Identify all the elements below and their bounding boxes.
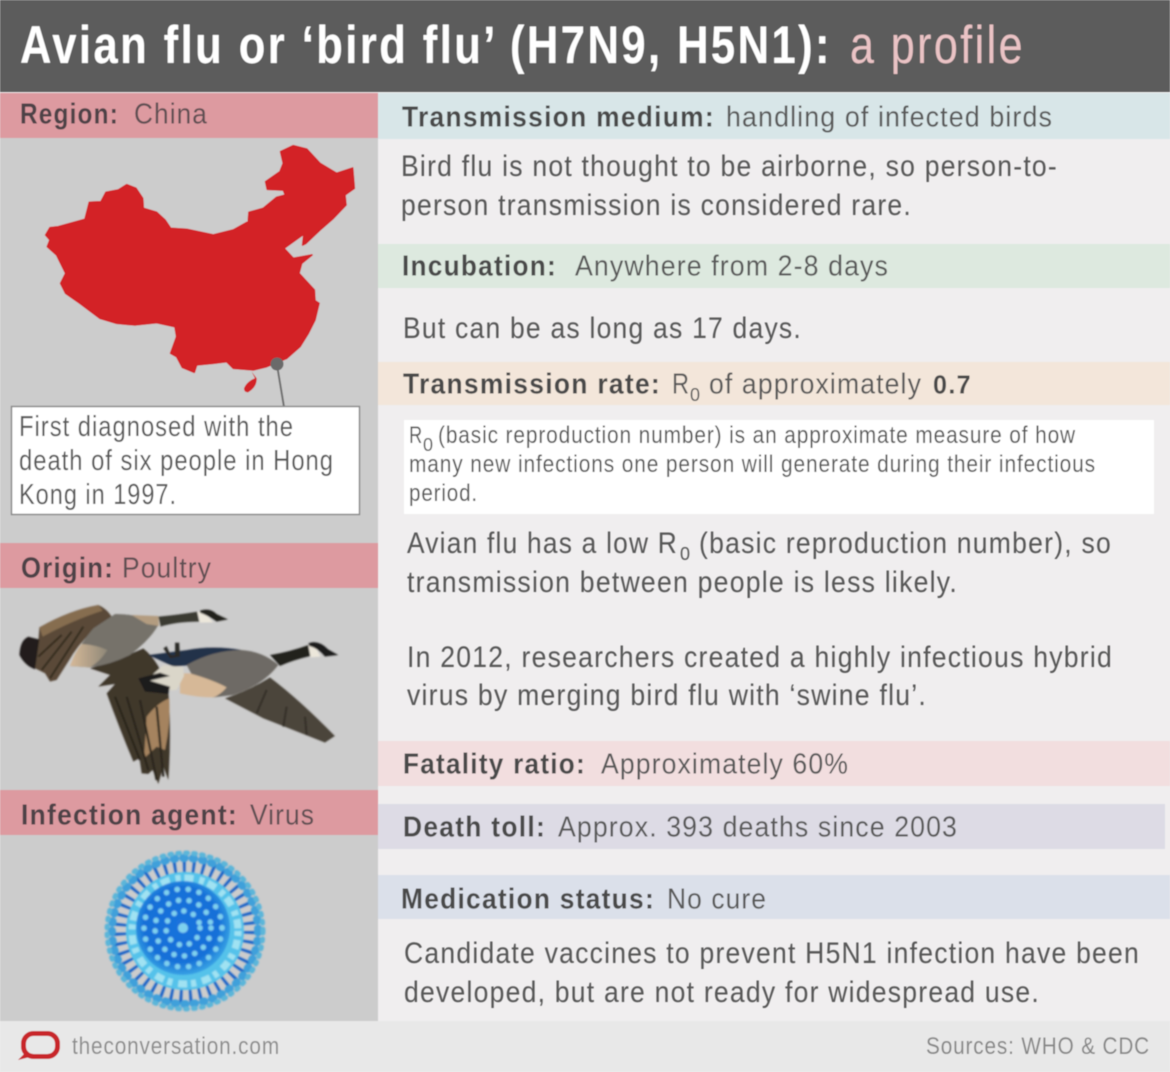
panel: transmission rate: 0.7: [933, 369, 972, 399]
callout: R0 definition: 0: [423, 435, 433, 455]
text: transmission description: Bird flu is not thought to be airborne, so person-to-: [401, 150, 1058, 183]
panel: transmission medium: [378, 93, 1170, 222]
callout: first diagnosed: death of six people in Hong: [19, 445, 334, 477]
text: vaccines: developed, but are not ready for widespread use.: [404, 976, 1040, 1009]
panel: fatality ratio: Approximately 60%: [601, 748, 849, 780]
panel: medication status: Medication status:: [401, 883, 655, 915]
rear goose lower wing: [90, 648, 170, 784]
callout: R0 definition: R: [409, 422, 423, 449]
text: 2012 hybrid virus: virus by merging bird flu with ‘swine flu’.: [407, 679, 927, 712]
panel: death toll: Approx. 393 deaths since 2003: [558, 811, 958, 843]
panel: death toll: [378, 804, 1165, 849]
heading: infection agent: Virus: [250, 799, 315, 831]
text: low R0 explanation: Avian flu has a low R: [407, 527, 678, 560]
footer: [0, 1021, 1170, 1072]
panel: transmission medium: handling of infected birds: [726, 101, 1053, 133]
panel: transmission rate: [378, 362, 1170, 712]
front goose far wing: [148, 647, 242, 667]
panel: transmission rate: 0: [690, 385, 700, 405]
heading: infection agent: Infection agent:: [21, 799, 238, 831]
callout: R0 definition: period.: [409, 480, 478, 507]
panel: transmission rate: of approximately: [709, 368, 922, 400]
callout: first diagnosed: Kong in 1997.: [19, 479, 177, 511]
panel: death toll: Death toll:: [403, 811, 546, 843]
map: China: [46, 146, 354, 392]
panel: fatality ratio: Fatality ratio:: [403, 748, 586, 780]
panel: incubation: Incubation:: [402, 250, 557, 282]
panel: transmission medium: Transmission medium:: [402, 101, 715, 133]
title: a profile: [850, 16, 1025, 75]
text: low R0 explanation: (basic reproduction number), so: [699, 527, 1112, 560]
panel: left column: [0, 93, 378, 1021]
callout: R0 definition: (basic reproduction number) is an approximate measure of how: [438, 422, 1076, 449]
front goose body: [187, 650, 278, 697]
panel: fatality ratio: [378, 741, 1170, 786]
text: low R0 explanation: 0: [680, 544, 690, 564]
image: flying geese: [19, 605, 338, 784]
panel: transmission rate: R: [672, 368, 690, 400]
text: 2012 hybrid virus: [407, 641, 1113, 712]
text: website: theconversation.com: [72, 1033, 280, 1060]
text: low R0 explanation: transmission between people is less likely.: [407, 566, 958, 599]
heading: origin: Poultry: [122, 552, 212, 584]
title: [0, 0, 1170, 92]
callout: first diagnosed: [12, 406, 360, 514]
heading: region: [0, 93, 378, 138]
heading: region: China: [134, 98, 208, 130]
text: incubation note: But can be as long as 17 days.: [403, 312, 802, 345]
text: low R0 explanation: [407, 527, 1112, 599]
text: transmission description: [401, 150, 1058, 222]
panel: incubation: Anywhere from 2-8 days: [575, 250, 889, 282]
callout: R0 definition: [404, 420, 1154, 514]
icon: The Conversation logo: [18, 1034, 58, 1060]
heading: region: Region:: [20, 98, 119, 130]
text: vaccines: [404, 937, 1140, 1009]
panel: transmission rate: Transmission rate:: [403, 368, 661, 400]
panel: incubation: [378, 244, 1170, 345]
icon: virus: [107, 853, 263, 1009]
heading: origin: [0, 543, 378, 588]
panel: medication status: No cure: [667, 883, 767, 915]
pointer: Hong Kong marker: [270, 358, 284, 407]
heading: origin: Origin:: [21, 552, 114, 584]
front goose lower wing: [225, 677, 335, 743]
title: Avian flu or ‘bird flu’ (H7N9, H5N1):: [20, 16, 832, 75]
rear goose upper wing: [35, 605, 115, 682]
rear goose body: [70, 614, 158, 667]
text: transmission description: person transmission is considered rare.: [401, 189, 912, 222]
heading: infection agent: [0, 790, 378, 835]
callout: first diagnosed: First diagnosed with the: [19, 411, 294, 443]
panel: medication status: [378, 875, 1170, 1009]
